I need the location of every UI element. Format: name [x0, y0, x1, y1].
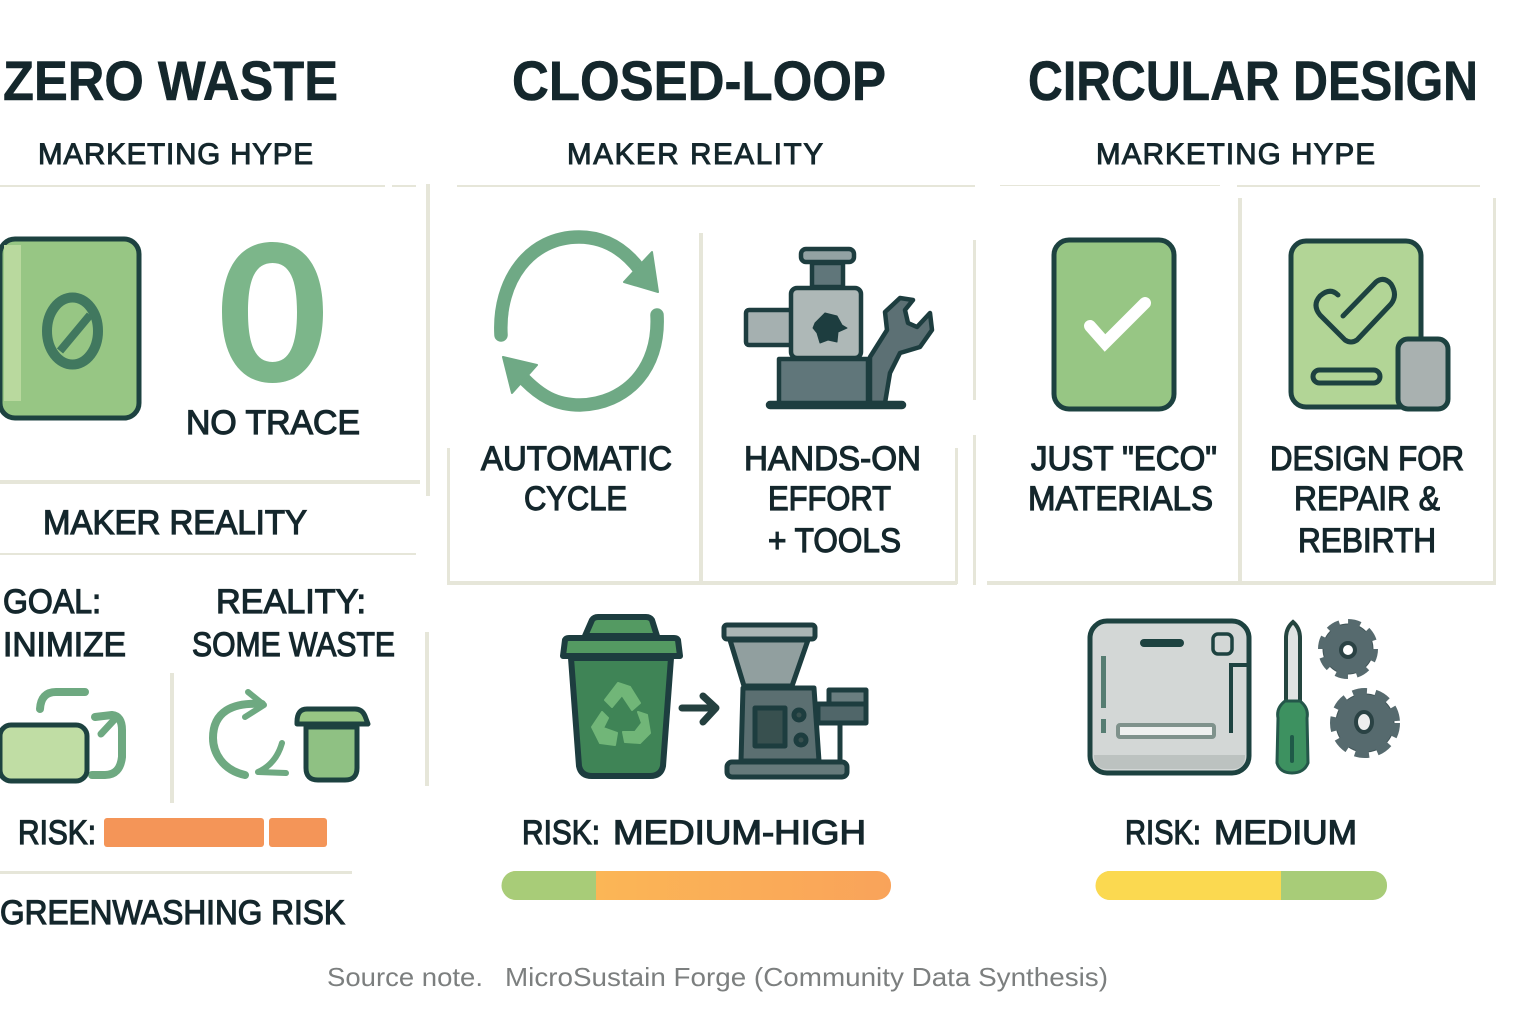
text: reality	[192, 583, 395, 664]
icon: screwdriver	[1277, 622, 1308, 773]
text: reality: SOME WASTE	[192, 626, 395, 664]
text: hands-on effort + tools: HANDS-ON	[744, 440, 921, 478]
text: just eco materials	[1028, 440, 1217, 518]
icon: device panel	[1090, 621, 1249, 773]
icon: automatic cycle	[501, 237, 658, 405]
risk label: medium-high	[522, 814, 866, 852]
panel: circular design	[1028, 49, 1478, 900]
risk label: medium: RISK:	[1125, 814, 1201, 852]
text: reality: REALITY:	[216, 583, 366, 621]
icon: gears	[1322, 623, 1396, 754]
risk bar: medium-high	[502, 871, 891, 900]
risk label: medium: MEDIUM	[1214, 814, 1357, 852]
icon: box with arrows	[0, 692, 122, 781]
icon: machine with wrench	[746, 249, 932, 407]
big zero	[222, 242, 323, 383]
text: design for repair and rebirth: REPAIR &	[1294, 480, 1440, 518]
text: automatic cycle: CYCLE	[524, 480, 627, 518]
icon: cycle with cup	[213, 692, 368, 780]
arrow: bin to grinder	[682, 696, 716, 722]
label: greenwashing risk: GREENWASHING RISK	[0, 894, 345, 932]
text: just eco materials: JUST "ECO"	[1031, 440, 1217, 478]
text: goal: INIMIZE	[3, 626, 126, 664]
text: just eco materials: MATERIALS	[1028, 480, 1213, 518]
icon: recycling bin	[563, 617, 680, 776]
title: closed-loop: CLOSED-LOOP	[512, 49, 886, 112]
label: maker reality: MAKER REALITY	[43, 504, 307, 542]
text: goal	[3, 583, 126, 664]
label: marketing hype: MARKETING HYPE	[1096, 138, 1375, 171]
icon: design document with check	[1291, 241, 1448, 409]
risk bar: medium	[1096, 871, 1387, 900]
risk label: medium-high: RISK:	[522, 814, 600, 852]
text: design for repair and rebirth: REBIRTH	[1298, 522, 1436, 560]
icon: zero card	[0, 239, 139, 418]
risk label: medium-high: MEDIUM-HIGH	[613, 814, 866, 852]
text: hands-on effort + tools: + TOOLS	[768, 522, 901, 560]
icon: grinder machine	[724, 625, 866, 777]
risk bar: zero waste: RISK:	[18, 814, 96, 852]
text: hands-on effort + tools: EFFORT	[768, 480, 891, 518]
text: no trace: NO TRACE	[186, 404, 360, 442]
risk label: medium	[1125, 814, 1357, 852]
text: goal: GOAL:	[3, 583, 101, 621]
title: zero waste: ZERO WASTE	[3, 49, 338, 112]
text: design for repair and rebirth: DESIGN FOR	[1270, 440, 1464, 478]
label: marketing hype: MARKETING HYPE	[38, 138, 313, 171]
title: circular design: CIRCULAR DESIGN	[1028, 49, 1478, 112]
label: maker reality: MAKER REALITY	[567, 138, 823, 171]
text: hands-on effort + tools	[744, 440, 921, 560]
risk bar: zero waste	[18, 814, 327, 852]
text: automatic cycle: AUTOMATIC	[481, 440, 672, 478]
text: design for repair and rebirth	[1270, 440, 1464, 560]
text: automatic cycle	[481, 440, 672, 518]
panel: closed-loop	[481, 49, 932, 900]
source note: MicroSustain Forge (Community Data Synthesis)	[505, 962, 1108, 992]
panel: zero waste	[0, 49, 395, 932]
source note: Source note.	[327, 962, 483, 992]
icon: eco check card	[1054, 240, 1174, 409]
